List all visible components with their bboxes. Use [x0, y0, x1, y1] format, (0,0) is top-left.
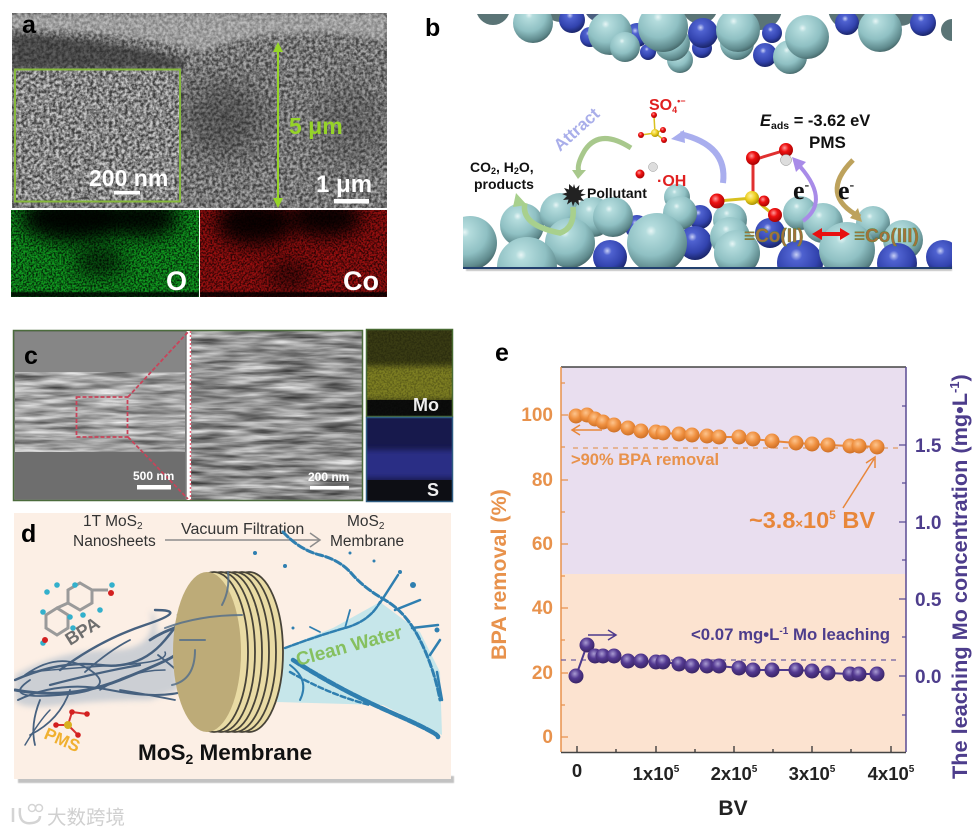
- S map: [366, 416, 454, 502]
- label: e- right: -: [850, 178, 855, 193]
- heading: Vacuum Filtration: Vacuum Filtration: [181, 521, 304, 538]
- Mo map: [366, 328, 454, 418]
- BPA molecule: [40, 582, 115, 646]
- background: [14, 513, 451, 779]
- sulfate molecule: [638, 112, 667, 143]
- heading: MoS2 Membrane: Membrane: [330, 533, 404, 550]
- annotation: 3.8x10^5 BV: 5: [829, 508, 836, 522]
- label: Eads: = -3.62 eV: [789, 112, 870, 130]
- label: Co: Co: [343, 266, 379, 296]
- left axis tick labels: 80: [532, 470, 553, 491]
- label: MoS2 Membrane: MoS: [138, 740, 186, 765]
- panel letter e: e: [495, 339, 509, 367]
- membrane disc stack: [165, 572, 283, 732]
- arrow: purple electron: [796, 162, 816, 221]
- annotation: 3.8x10^5 BV: [749, 457, 875, 533]
- axes: [561, 367, 906, 752]
- heading: MoS2 Membrane: 2: [379, 521, 385, 532]
- right axis tick labels: 1.0: [915, 513, 941, 534]
- right axis tick labels: 0.0: [915, 667, 941, 688]
- right axis tick labels: 0.5: [915, 590, 942, 611]
- label: Clean Water: Clean Water: [294, 622, 405, 671]
- reference line: Mo limit: [561, 659, 900, 661]
- x ticks: [577, 746, 891, 752]
- label: e- right: e: [838, 176, 850, 205]
- hydroxyl radical: ·OH: [657, 173, 686, 190]
- PMS molecule: [710, 143, 793, 222]
- label: Co(III): ≡Co(III): [854, 226, 919, 247]
- label: CO2, H2O, products: CO: [470, 159, 491, 175]
- label: MoS2 Membrane: Membrane: [193, 740, 312, 765]
- label: BPA: BPA: [62, 613, 103, 649]
- annotation: Mo leaching: -1: [779, 626, 789, 637]
- cobalt map: [200, 210, 387, 297]
- left axis tick labels: 60: [532, 534, 553, 555]
- gold arrowhead: [850, 208, 862, 222]
- green arrowhead: [513, 193, 527, 207]
- panel a: SEM cross-section with elemental maps: [11, 13, 387, 297]
- right axis title: -1: [947, 381, 962, 393]
- annotation: 3.8x10^5 BV: ~3.8×10: [749, 507, 829, 533]
- x axis tick labels: 5: [674, 764, 680, 775]
- panel b: catalytic mechanism on atomic surface: [463, 14, 952, 272]
- panel background: [463, 14, 952, 268]
- heading: MoS2 Membrane: MoS: [347, 513, 379, 530]
- heading: 1T MoS2 Nanosheets: 2: [137, 521, 143, 532]
- inset frame: [15, 70, 180, 202]
- left axis tick labels: 0: [542, 727, 553, 748]
- right axis title: ): [947, 374, 972, 381]
- watermark text: 大数跨境: [47, 801, 125, 830]
- arrow: products green: [524, 203, 573, 233]
- label: CO2, H2O, products: 2: [514, 166, 519, 176]
- x axis tick labels: 5: [909, 764, 915, 775]
- x axis tick labels: 3x10: [789, 763, 830, 784]
- panel e: BPA removal and Mo leaching chart: [487, 367, 972, 820]
- x axis tick labels: [572, 760, 915, 784]
- panel shadow: [466, 266, 952, 271]
- left ticks: [561, 383, 568, 737]
- label: Pollutant: Pollutant: [587, 185, 647, 201]
- water crossing disc: [165, 572, 242, 685]
- label: CO2, H2O, products: , H: [496, 159, 514, 175]
- label: MoS2 Membrane: 2: [186, 751, 194, 767]
- x axis tick labels: 1x10: [633, 763, 674, 784]
- PMS molecule small: [53, 709, 90, 738]
- right ticks: [899, 406, 906, 715]
- top atoms: [463, 14, 952, 267]
- label: SO4 radical: 4: [672, 105, 677, 115]
- high-magnification SEM: [191, 331, 363, 500]
- left axis tick labels: 20: [532, 663, 553, 684]
- right axis title: The leaching Mo concentration (mg•L: [947, 393, 972, 779]
- scale bar: 1 um: 1 μm: [316, 171, 372, 198]
- heading: 1T MoS2 Nanosheets: 1T MoS: [83, 513, 137, 530]
- x axis tick labels: 0: [572, 760, 582, 781]
- shadow: [18, 776, 454, 783]
- scale bar: 200 nm: 200 nm: [89, 165, 168, 191]
- label: CO2, H2O, products: O,: [519, 159, 534, 175]
- label: Eads: ads: [771, 120, 789, 132]
- panel letter b: b: [425, 14, 440, 42]
- panel c: membrane cross-section: [13, 329, 463, 502]
- annotation: Mo leaching: <0.07 mg•L: [691, 625, 779, 644]
- label: e- left: e: [793, 176, 805, 205]
- x axis tick labels: 4x10: [868, 763, 909, 784]
- label: SO4 radical: •−: [677, 96, 686, 106]
- x axis tick labels: 2x10: [711, 763, 752, 784]
- label: Attract: Attract: [550, 104, 604, 155]
- Mo leaching series: [568, 638, 884, 684]
- label: Mo: Mo: [413, 395, 439, 415]
- BPA removal series: [568, 408, 884, 454]
- frame: [14, 330, 362, 500]
- panel letter c: c: [24, 342, 38, 370]
- zoom region box and lines: [76, 332, 188, 499]
- left axis tick labels: 40: [532, 598, 553, 619]
- left axis tick labels: 100: [521, 405, 553, 426]
- left axis title: BPA removal (%): [487, 489, 511, 660]
- attract arrowhead: [572, 170, 586, 179]
- heading: 1T MoS2 Nanosheets: Nanosheets: [73, 533, 156, 550]
- clean water splash: [15, 532, 442, 745]
- arrow: gold electron: [837, 160, 860, 217]
- redox arrow: [812, 228, 850, 240]
- x axis tick labels: 5: [830, 764, 836, 775]
- annotation: 3.8x10^5 BV: BV: [836, 507, 875, 533]
- panel letter a: a: [22, 11, 37, 39]
- SEM image: [12, 13, 387, 208]
- hydroxyl radical: [636, 162, 686, 190]
- panel letter d: d: [21, 520, 36, 548]
- label: O: O: [166, 266, 187, 296]
- plot backgrounds: [561, 367, 906, 574]
- watermark: [13, 801, 125, 830]
- arrow: blue PMS to radicals: [680, 134, 723, 183]
- thickness arrow: [273, 42, 283, 208]
- low-magnification SEM: [13, 330, 188, 501]
- right axis tick labels: 1.5: [915, 436, 942, 457]
- arrow: attract green: [578, 138, 631, 172]
- label: Eads: E: [760, 112, 772, 130]
- annotation: over 90% removal: >90% BPA removal: [571, 451, 719, 469]
- right axis tick labels: [915, 436, 942, 688]
- process arrow: [165, 533, 320, 547]
- reference line: 90% removal: [573, 447, 900, 449]
- label: e- left: -: [805, 178, 810, 193]
- bottom edge line: [463, 267, 952, 269]
- blue arrowhead: [671, 130, 685, 143]
- label: Co(II): ≡Co(II): [744, 226, 804, 247]
- left axis tick labels: [521, 405, 553, 748]
- arrow: points to left axis: [572, 425, 602, 435]
- bottom atoms: [626, 215, 643, 235]
- scale bar: 500 nm: 500 nm: [133, 469, 174, 483]
- dotted divider: [187, 331, 190, 500]
- label: PMS: PMS: [41, 724, 83, 756]
- scale bar: 200 nm: 200 nm: [308, 470, 349, 484]
- label: CO2, H2O, products: 2: [491, 166, 496, 176]
- arrow: points to right axis: [588, 630, 616, 640]
- x axis title: BV: [718, 797, 748, 820]
- oxygen map: [11, 210, 199, 297]
- polluted water splash: [15, 610, 178, 707]
- label: SO4 radical: SO: [649, 97, 672, 114]
- icon: pollutant: [562, 184, 586, 206]
- purple arrowhead: [792, 157, 806, 172]
- label: S: S: [427, 480, 439, 500]
- annotation: Mo leaching: Mo leaching: [788, 625, 890, 644]
- label: CO2, H2O, products: products: [474, 176, 534, 192]
- scale bar: 500 nm: [133, 469, 174, 490]
- label: 5 um: 5 μm: [289, 113, 343, 139]
- panel d: MoS2 membrane filtration illustration: [14, 513, 454, 783]
- x axis tick labels: 5: [752, 764, 758, 775]
- watermark logo: [13, 804, 42, 823]
- label: PMS: PMS: [809, 133, 846, 152]
